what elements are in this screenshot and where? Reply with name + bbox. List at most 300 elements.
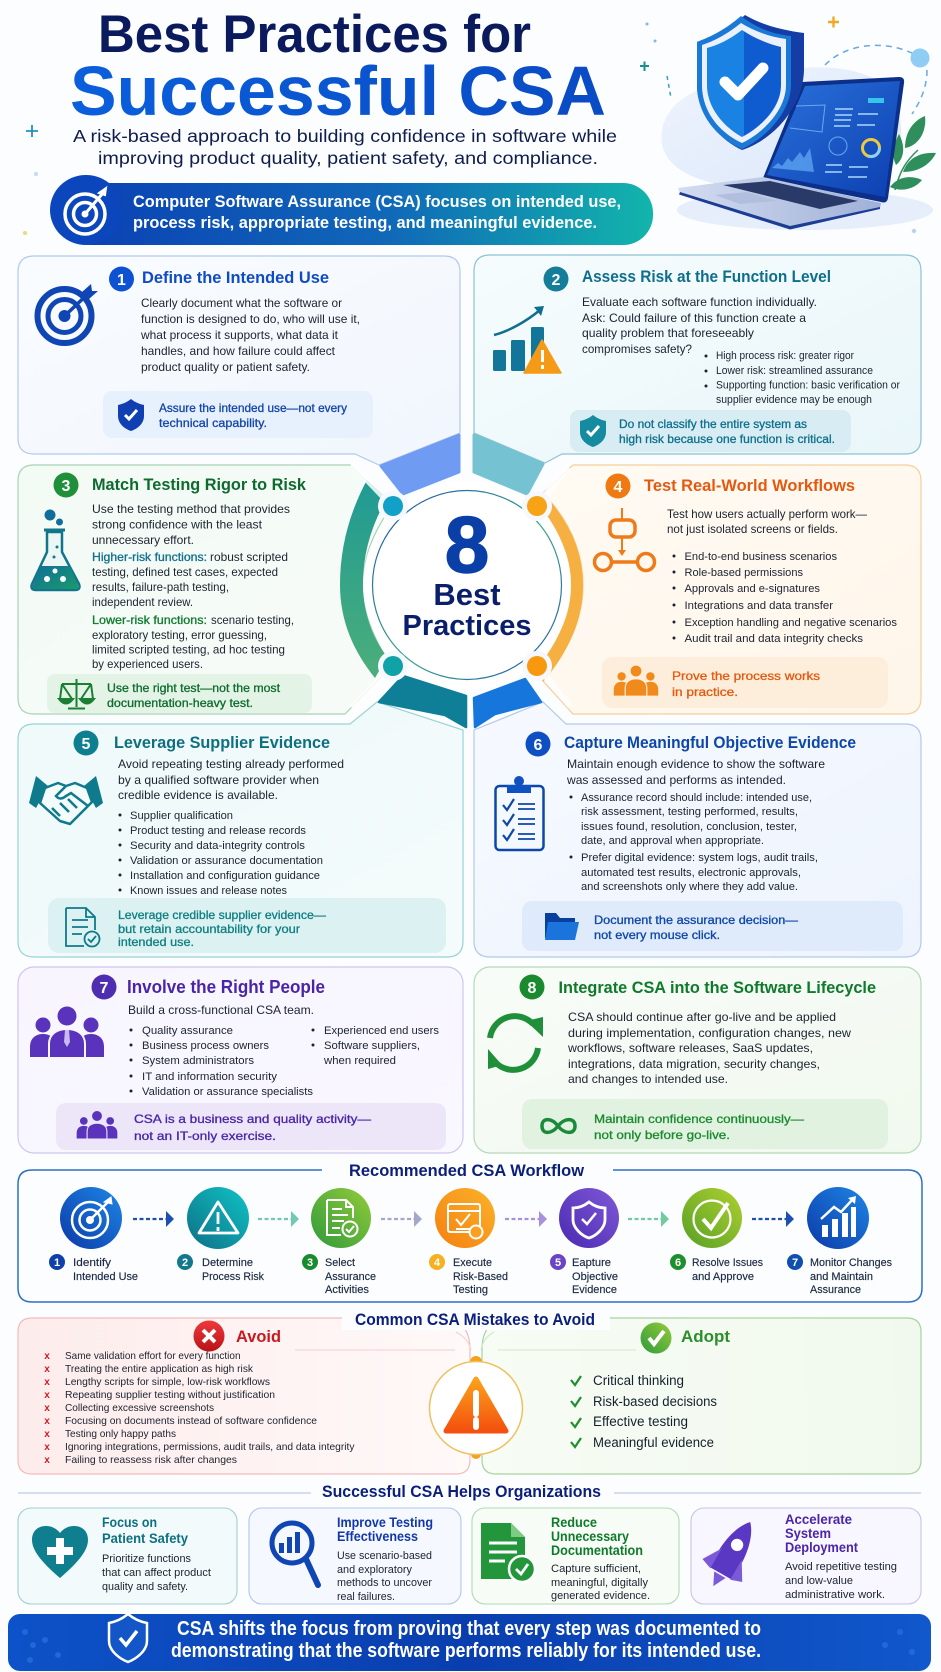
bullet list (704, 350, 900, 406)
bullet list: and screenshots only where they add value. (581, 881, 798, 893)
body text: Lower-risk functions: (92, 613, 207, 627)
bullet list (118, 810, 323, 897)
callout: not every mouse click. (594, 928, 720, 942)
icon: people (614, 666, 658, 696)
body text: handles, and how failure could affect (141, 344, 336, 358)
body text: scenario testing, (211, 613, 294, 627)
hub text: Best (433, 577, 501, 612)
callout: in practice. (672, 685, 738, 699)
number badge 4 (606, 474, 630, 498)
step 1 label: Intended Use (73, 1271, 138, 1283)
connector nodes (378, 491, 552, 681)
step 7 label: Assurance (810, 1284, 861, 1296)
banner text: process risk, appropriate testing, and meaningful evidence. (133, 213, 597, 232)
adopt list: Risk-based decisions (593, 1394, 717, 1409)
step 1 label: Identify (73, 1257, 112, 1269)
heading: Define the Intended Use (142, 269, 329, 287)
avoid list: Lengthy scripts for simple, low-risk workflows (65, 1377, 270, 1388)
icon: clipboard (496, 776, 544, 850)
heading: Involve the Right People (127, 977, 325, 997)
callout (47, 674, 312, 713)
number badge 1 (109, 266, 134, 292)
callout: Leverage credible supplier evidence— (118, 908, 326, 922)
icon: team (30, 1006, 104, 1058)
adopt list: Effective testing (593, 1414, 688, 1429)
step labels (49, 1254, 892, 1296)
bullet list: Prefer digital evidence: system logs, audit trails, (581, 852, 818, 864)
body text: by experienced users. (92, 657, 203, 671)
body text: during implementation, configuration changes, new (568, 1026, 851, 1040)
background blob (661, 67, 901, 190)
bullet list: right column: Experienced end users (324, 1025, 440, 1037)
adopt list: Critical thinking (593, 1373, 684, 1388)
body text (567, 1010, 851, 1086)
panel 4: test real-world workflows (542, 465, 921, 714)
body text: testing, defined test cases, expected (92, 565, 278, 579)
step 7 label: Monitor Changes (810, 1257, 892, 1269)
avoid list: Testing only happy paths (65, 1429, 176, 1440)
body text: was assessed and performs as intended. (566, 773, 786, 787)
arrowheads (166, 1211, 794, 1227)
icon: target in blue circle (50, 175, 122, 245)
card heading: Deployment (785, 1540, 858, 1555)
callout: Do not classify the entire system as (619, 417, 807, 431)
avoid list: Collecting excessive screenshots (65, 1403, 214, 1414)
number badge 5 (74, 730, 98, 756)
avoid markers (44, 1351, 50, 1466)
icon: rising bars with warning (493, 306, 561, 373)
avoid markers: x (44, 1364, 50, 1375)
callout (522, 901, 903, 951)
card text: meaningful, digitally (551, 1577, 648, 1589)
card text: quality and safety. (102, 1581, 188, 1593)
number badge 2 (544, 266, 568, 292)
top left wedge (381, 435, 459, 494)
avoid list: Failing to reassess risk after changes (65, 1455, 237, 1466)
avoid markers: x (44, 1403, 50, 1414)
card heading: System (785, 1526, 831, 1541)
card text (337, 1550, 432, 1603)
body text (582, 295, 817, 356)
bullet list: Known issues and release notes (130, 885, 287, 897)
bullet list: date, and approval when appropriate. (581, 835, 764, 847)
avoid list: Focusing on documents instead of software confidence (65, 1416, 317, 1427)
hub text: 8 (445, 500, 489, 589)
bullet list: issues found, resolution, conclusion, tester, (581, 821, 797, 833)
body text: Clearly document what the software or (141, 296, 342, 310)
number badge 8 (520, 974, 544, 1000)
icon: folder (545, 913, 579, 940)
card text: generated evidence. (551, 1590, 650, 1602)
body text: Use the testing method that provides (92, 502, 290, 516)
card heading: Reduce (551, 1515, 597, 1530)
heading: Assess Risk at the Function Level (582, 268, 831, 286)
body text: limited scripted testing, ad hoc testing (92, 642, 285, 656)
icon: target (38, 284, 98, 343)
avoid list (65, 1351, 355, 1466)
card text: Capture sufficient, (551, 1563, 641, 1575)
step 2 label: 2 (182, 1257, 188, 1269)
bullet list: right column (312, 1025, 440, 1067)
bullet list: left column: Validation or assurance specialists (142, 1086, 313, 1098)
body text (92, 502, 294, 671)
callout (570, 410, 851, 452)
panel 5: leverage supplier evidence (18, 702, 463, 957)
card heading: Unnecessary (551, 1529, 629, 1544)
icon: flask (32, 510, 80, 590)
body text: Maintain enough evidence to show the software (567, 757, 825, 771)
step 3 label: Assurance (325, 1271, 376, 1283)
section heading: Common CSA Mistakes to Avoid (355, 1311, 595, 1329)
card text: and exploratory (337, 1564, 412, 1576)
step 6 icon: circle check (682, 1188, 742, 1248)
icon: document with check (66, 908, 100, 946)
adopt list (593, 1373, 717, 1450)
avoid markers: x (44, 1351, 50, 1362)
bottom right wedge (474, 679, 541, 727)
callout: intended use. (118, 935, 194, 949)
subtitle (73, 126, 617, 168)
callout (602, 657, 888, 708)
bullet list: Installation and configuration guidance (130, 870, 320, 882)
body text: CSA should continue after go-live and be applied (568, 1010, 836, 1024)
step 5 label (550, 1254, 618, 1296)
body text: Ask: Could failure of this function create a (582, 311, 806, 325)
adopt badge (640, 1322, 672, 1354)
body text: independent review. (92, 595, 193, 609)
banner text: Computer Software Assurance (CSA) focuses on intended use, (133, 192, 621, 211)
callout: documentation-heavy test. (107, 696, 253, 710)
body text: not just isolated screens or fields. (667, 522, 838, 536)
screen details (772, 98, 884, 177)
heading: Integrate CSA into the Software Lifecycle (558, 979, 876, 997)
card heading: Patient Safety (102, 1531, 188, 1546)
body text (566, 757, 825, 787)
banner text (133, 192, 621, 232)
callout: Use the right test—not the most (107, 681, 281, 695)
header (23, 5, 936, 245)
shield (697, 15, 804, 150)
number badge 3: 3 (62, 478, 71, 495)
panel 2: assess risk at the function level (474, 255, 921, 463)
icon: heart with cross (32, 1526, 88, 1578)
adopt list: Meaningful evidence (593, 1435, 714, 1450)
heading: Leverage Supplier Evidence (114, 734, 330, 752)
body text: what process it supports, what data it (140, 328, 339, 342)
card text: real failures. (337, 1591, 395, 1603)
number badge 2: 2 (552, 272, 561, 289)
bullet list: Lower risk: streamlined assurance (716, 365, 873, 377)
icon: decorative plus marks (23, 16, 916, 235)
callout: Document the assurance decision— (594, 913, 798, 927)
step 2 icon: warning (187, 1187, 249, 1249)
callout (48, 898, 446, 953)
shield check mark (725, 68, 763, 95)
section: common CSA mistakes (18, 1308, 921, 1474)
step 4 label (429, 1254, 508, 1296)
step 2 label (177, 1254, 264, 1283)
icon: scales (59, 679, 94, 708)
illustration: shield and laptop (661, 15, 936, 230)
section heading: Successful CSA Helps Organizations (322, 1483, 601, 1501)
central hub: 8 best practices (340, 435, 583, 727)
adopt checks (571, 1376, 581, 1447)
body text: by a qualified software provider when (118, 773, 319, 787)
card text: Prioritize functions (102, 1553, 191, 1565)
card heading: Accelerate (785, 1512, 852, 1527)
panel: avoid (18, 1318, 471, 1474)
number badge 8: 8 (528, 980, 537, 997)
step 4 label: Execute (453, 1257, 492, 1269)
bottom left wedge (379, 676, 466, 727)
bullet list: Approvals and e-signatures (684, 583, 820, 595)
title: Successful CSA (70, 52, 606, 130)
step 4 label: 4 (434, 1257, 441, 1269)
number badge 7: 7 (100, 980, 109, 997)
footer message (171, 1618, 761, 1662)
top right wedge (474, 435, 543, 494)
step 3 label: Select (325, 1257, 355, 1269)
body text: strong confidence with the least (92, 518, 263, 532)
bullet list: left column: Business process owners (142, 1040, 269, 1052)
panel: adopt (481, 1318, 921, 1474)
number badge 5: 5 (82, 736, 91, 753)
icon: infinity (542, 1120, 575, 1132)
card: reduce documentation (472, 1508, 679, 1604)
laptop base (678, 177, 881, 228)
arrows between steps (133, 1218, 788, 1220)
body text: Avoid repeating testing already performed (118, 757, 344, 771)
callout (56, 1103, 446, 1150)
step 5 icon: shield (559, 1188, 619, 1248)
warning medallion (430, 1356, 522, 1459)
bullet list: Role-based permissions (684, 567, 803, 579)
step 2 label: Determine (202, 1257, 253, 1269)
footer message: demonstrating that the software performs reliably for its intended use. (171, 1640, 761, 1662)
callout: but retain accountability for your (118, 922, 300, 936)
body text: Evaluate each software function individually. (582, 295, 817, 309)
body text: compromises safety? (582, 342, 692, 356)
bullet list: risk assessment, testing performed, results, (581, 806, 798, 818)
bullet list: Integrations and data transfer (684, 600, 833, 612)
body text: Build a cross-functional CSA team. (128, 1003, 314, 1017)
step 1 label (49, 1254, 138, 1283)
footer message: CSA shifts the focus from proving that every step was documented to (177, 1618, 761, 1640)
panel 3: match testing rigor to risk (18, 465, 392, 714)
bullet list: left column: IT and information security (142, 1071, 278, 1083)
avoid markers: x (44, 1455, 50, 1466)
ground shadow (677, 190, 933, 230)
callout: not only before go-live. (594, 1128, 730, 1142)
card text: administrative work. (785, 1589, 885, 1601)
bullet list: supplier evidence may be enough (716, 394, 872, 406)
avoid markers: x (44, 1390, 50, 1401)
card text (785, 1561, 897, 1601)
bullet list: Exception handling and negative scenarios (684, 617, 897, 629)
card heading: Focus on (102, 1515, 157, 1530)
heading: Match Testing Rigor to Risk (92, 476, 307, 494)
icon: handshake (29, 776, 103, 824)
avoid list: Treating the entire application as high risk (65, 1364, 254, 1375)
avoid markers: x (44, 1377, 50, 1388)
body text: Higher-risk functions: (92, 550, 207, 564)
avoid markers: x (44, 1429, 50, 1440)
bullet list: Product testing and release records (130, 825, 307, 837)
icon: shield check (580, 415, 606, 447)
callout: not an IT-only exercise. (134, 1129, 276, 1143)
avoid list: Same validation effort for every function (65, 1351, 241, 1362)
number badge 6: 6 (534, 737, 543, 754)
number badge 6 (526, 732, 550, 756)
laptop screen (763, 77, 904, 202)
panel 6: capture meaningful objective evidence (474, 702, 921, 957)
section heading: Recommended CSA Workflow (349, 1162, 584, 1180)
callout: Prove the process works (672, 669, 820, 683)
title (70, 5, 606, 130)
step 1 icon: target (60, 1187, 122, 1249)
icon: rocket (693, 1511, 770, 1598)
number badge 7 (92, 974, 116, 1000)
card heading: Improve Testing (337, 1515, 433, 1530)
step 7 label: 7 (792, 1257, 798, 1269)
body text: robust scripted (210, 550, 288, 564)
card heading: Effectiveness (337, 1529, 418, 1544)
step 3 label: Activities (325, 1284, 369, 1296)
bullet list: left column: System administrators (142, 1055, 255, 1067)
card text: that can affect product (102, 1567, 211, 1579)
leaves (890, 116, 936, 190)
bullet list: Audit trail and data integrity checks (684, 633, 864, 645)
icon: shield check (118, 399, 144, 431)
footer banner (8, 1614, 931, 1671)
section: successful CSA helps organizations (18, 1483, 921, 1604)
bullet list: right column: when required (323, 1055, 396, 1067)
icon: people (77, 1111, 117, 1139)
step 5 label: Evidence (572, 1284, 617, 1296)
card text: and low-value (785, 1575, 853, 1587)
body text: credible evidence is available. (118, 788, 278, 802)
step 2 label: Process Risk (202, 1271, 264, 1283)
card: accelerate deployment (691, 1508, 921, 1604)
step 6 label: and Approve (692, 1271, 754, 1283)
body text: workflows, software releases, SaaS updates, (567, 1041, 813, 1055)
body text: unnecessary effort. (92, 533, 194, 547)
body text: function is designed to do, who will use it, (141, 312, 360, 326)
avoid markers: x (44, 1442, 50, 1453)
step 5 label: 5 (555, 1257, 561, 1269)
card text: Avoid repetitive testing (785, 1561, 897, 1573)
avoid heading: Avoid (236, 1327, 281, 1346)
callout (103, 391, 373, 438)
avoid badge (194, 1320, 224, 1352)
bullet list: Validation or assurance documentation (130, 855, 323, 867)
body text: exploratory testing, error guessing, (92, 628, 267, 642)
card text: Use scenario-based (337, 1550, 432, 1562)
card text (551, 1563, 650, 1602)
step 1 label: 1 (54, 1257, 60, 1269)
callout: CSA is a business and quality activity— (134, 1112, 371, 1126)
callout: technical capability. (159, 416, 267, 430)
callout (522, 1099, 888, 1149)
bullet list: End-to-end business scenarios (684, 551, 838, 563)
center circle (363, 481, 571, 689)
step 7 label (787, 1254, 892, 1296)
heading: Capture Meaningful Objective Evidence (564, 734, 856, 752)
adopt heading: Adopt (681, 1327, 730, 1346)
callout: high risk because one function is critical. (619, 432, 835, 446)
step 4 label: Risk-Based (453, 1271, 508, 1283)
step 6 label: 6 (675, 1257, 681, 1269)
step 3 label: 3 (307, 1257, 313, 1269)
card: patient safety (18, 1508, 237, 1604)
panel 7: involve the right people (18, 967, 463, 1153)
number badge 1: 1 (117, 272, 126, 289)
card heading (551, 1515, 643, 1558)
bullet list: Supporting function: basic verification or (716, 380, 900, 392)
step 3 icon: document check (311, 1188, 371, 1248)
hub text: Practices (402, 610, 532, 642)
icon: footer shield (109, 1614, 147, 1662)
body text: Test how users actually perform work— (667, 507, 867, 521)
card text (102, 1553, 211, 1593)
icon: workflow (594, 508, 654, 570)
heading: Test Real-World Workflows (644, 477, 855, 495)
step 6 label (670, 1254, 763, 1283)
body text: quality problem that foreseeably (582, 326, 754, 340)
body text (667, 507, 867, 536)
step 4 icon: test window (435, 1188, 495, 1248)
dashed orbit (825, 45, 927, 114)
body text: and changes to intended use. (568, 1072, 728, 1086)
callout: Maintain confidence continuously— (594, 1112, 804, 1126)
step 4 label: Testing (453, 1284, 488, 1296)
card: testing effectiveness (249, 1508, 461, 1604)
card text: methods to uncover (337, 1577, 432, 1589)
left arc band (340, 480, 387, 678)
icon: cycle arrows (488, 1016, 543, 1070)
step 5 label: Eapture (572, 1257, 611, 1269)
bullet list: left column: Quality assurance (142, 1025, 233, 1037)
bullet list: High process risk: greater rigor (716, 350, 854, 362)
avoid list: Repeating supplier testing without justification (65, 1390, 275, 1401)
right arc band (543, 493, 583, 682)
bullet list: Supplier qualification (130, 810, 233, 822)
avoid markers: x (44, 1416, 50, 1427)
body text: integrations, data migration, security changes, (568, 1057, 820, 1071)
step 3 label (302, 1254, 376, 1296)
number badge 3 (54, 472, 78, 498)
card heading (337, 1515, 433, 1544)
body text (140, 296, 360, 374)
section: recommended CSA workflow (18, 1162, 922, 1302)
step 5 label: Objective (572, 1271, 618, 1283)
step 6 label: Resolve Issues (692, 1257, 763, 1269)
body text: product quality or patient safety. (141, 360, 310, 374)
subtitle: A risk-based approach to building confidence in software while (73, 126, 617, 146)
hub text (402, 500, 532, 642)
body text: results, failure-path testing, (92, 580, 229, 594)
bullet list (672, 551, 897, 645)
panel 8: integrate CSA into the software lifecycle (474, 967, 921, 1153)
body text (118, 757, 344, 802)
bullet list (570, 792, 818, 893)
bullet list: Assurance record should include: intended use, (581, 792, 812, 804)
number badge 4: 4 (614, 479, 623, 496)
bullet list: right column: Software suppliers, (324, 1040, 420, 1052)
title: Best Practices for (98, 5, 531, 64)
avoid list: Ignoring integrations, permissions, audit trails, and data integrity (65, 1442, 355, 1453)
bullet list: left column (130, 1025, 313, 1098)
